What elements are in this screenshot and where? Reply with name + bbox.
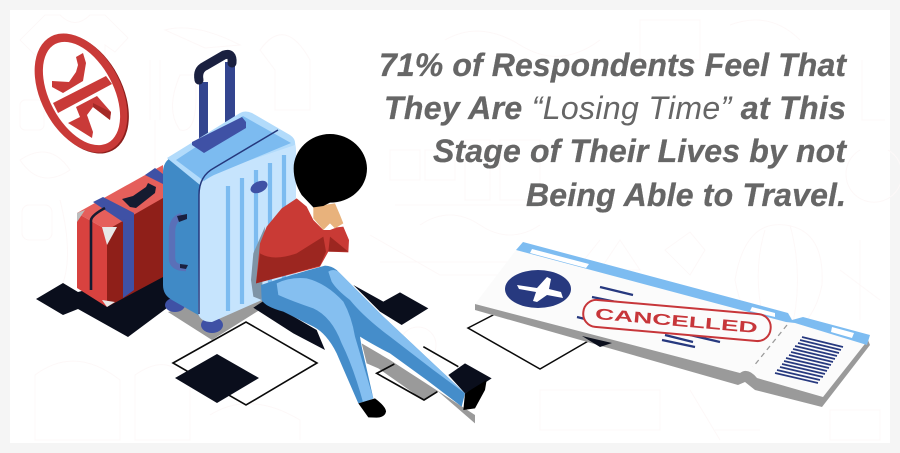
strap on top bbox=[93, 197, 134, 223]
strap on side bbox=[123, 219, 134, 298]
band slit right bbox=[831, 327, 854, 338]
cancelled ticket bbox=[468, 242, 870, 407]
jeans silhouette bbox=[261, 266, 465, 407]
far leg highlight bbox=[328, 270, 465, 393]
side handle caps bbox=[177, 214, 188, 269]
near leg highlight bbox=[277, 278, 373, 403]
far strap bbox=[145, 168, 163, 184]
dark shadow under person bbox=[253, 300, 325, 350]
person and surrounding floor bbox=[251, 134, 492, 423]
heading line 1: 71% of Respondents Feel That bbox=[379, 47, 847, 83]
hair bbox=[294, 134, 367, 207]
cancelled stamp bbox=[582, 299, 772, 342]
grey suitcase shadow bbox=[168, 285, 266, 340]
handle base bbox=[192, 117, 246, 153]
plane badge bbox=[505, 270, 571, 308]
tear line bbox=[753, 325, 787, 367]
front face bbox=[198, 130, 296, 322]
plane icon bbox=[517, 277, 563, 302]
far shoe bbox=[463, 380, 487, 410]
dark tile behind legs bbox=[353, 285, 428, 325]
outlined floor tile behind ticket bbox=[468, 313, 590, 369]
badge bbox=[249, 178, 269, 196]
sleeve shadow bbox=[328, 237, 348, 252]
front face bbox=[77, 213, 107, 307]
seam bbox=[199, 130, 278, 314]
heading line 4: Being Able to Travel. bbox=[526, 177, 846, 213]
top face bbox=[77, 165, 163, 230]
dark floor tile under red case bbox=[36, 270, 175, 337]
icon: no-flight sign bbox=[16, 18, 148, 169]
top face inner bbox=[176, 116, 291, 181]
near shoe bbox=[358, 398, 386, 418]
red suitcase bbox=[77, 165, 163, 307]
dark floor tile bbox=[175, 354, 259, 403]
heading line 2: They Are “Losing Time” at This bbox=[384, 90, 846, 126]
side handle bbox=[172, 216, 186, 268]
plane lower half bbox=[68, 96, 111, 138]
band slit middle bbox=[750, 307, 775, 317]
sign ring shadow bbox=[17, 19, 148, 169]
ticket body bbox=[475, 250, 868, 397]
heading text bbox=[379, 47, 847, 213]
ribs bbox=[228, 155, 284, 311]
heading line 3: Stage of Their Lives by not bbox=[433, 133, 847, 169]
sign ring bbox=[16, 18, 146, 168]
handle grip bbox=[199, 54, 232, 80]
small outlined tile bbox=[377, 347, 458, 400]
blue suitcase bbox=[163, 54, 296, 333]
back shadow on suitcase bbox=[251, 227, 265, 300]
grey shadow beside legs bbox=[362, 343, 475, 423]
case band bbox=[91, 208, 105, 290]
stamp text: CANCELLED bbox=[594, 306, 758, 337]
band slit left bbox=[530, 249, 589, 268]
sweater bbox=[256, 198, 349, 283]
ticket detail lines bbox=[577, 287, 720, 347]
plane lower shade bbox=[93, 103, 111, 120]
hands and face bbox=[313, 203, 343, 230]
wheel left bbox=[165, 298, 185, 312]
barcode bbox=[775, 337, 843, 383]
corner cap left bbox=[77, 210, 85, 222]
top face rim bbox=[167, 112, 295, 185]
corner cap bottom bbox=[102, 300, 115, 307]
crossing bar bbox=[53, 76, 112, 113]
ticket shadow bbox=[475, 304, 870, 407]
left face bbox=[163, 158, 200, 316]
dark tile under shoe bbox=[448, 363, 492, 393]
corner cap top bbox=[102, 227, 117, 245]
plane upper half bbox=[52, 53, 86, 93]
stamp outline bbox=[582, 299, 772, 342]
telescopic handle poles bbox=[199, 62, 235, 142]
dark tile tip bbox=[582, 336, 612, 347]
sweater shadow bbox=[256, 237, 326, 283]
wheel front bbox=[201, 317, 223, 333]
case handle bbox=[122, 183, 156, 208]
outlined floor tile bbox=[173, 322, 317, 405]
side face bbox=[107, 198, 163, 307]
ticket top band bbox=[516, 242, 870, 345]
sign inner opening bbox=[27, 29, 136, 158]
floor pieces behind luggage bbox=[36, 270, 317, 405]
